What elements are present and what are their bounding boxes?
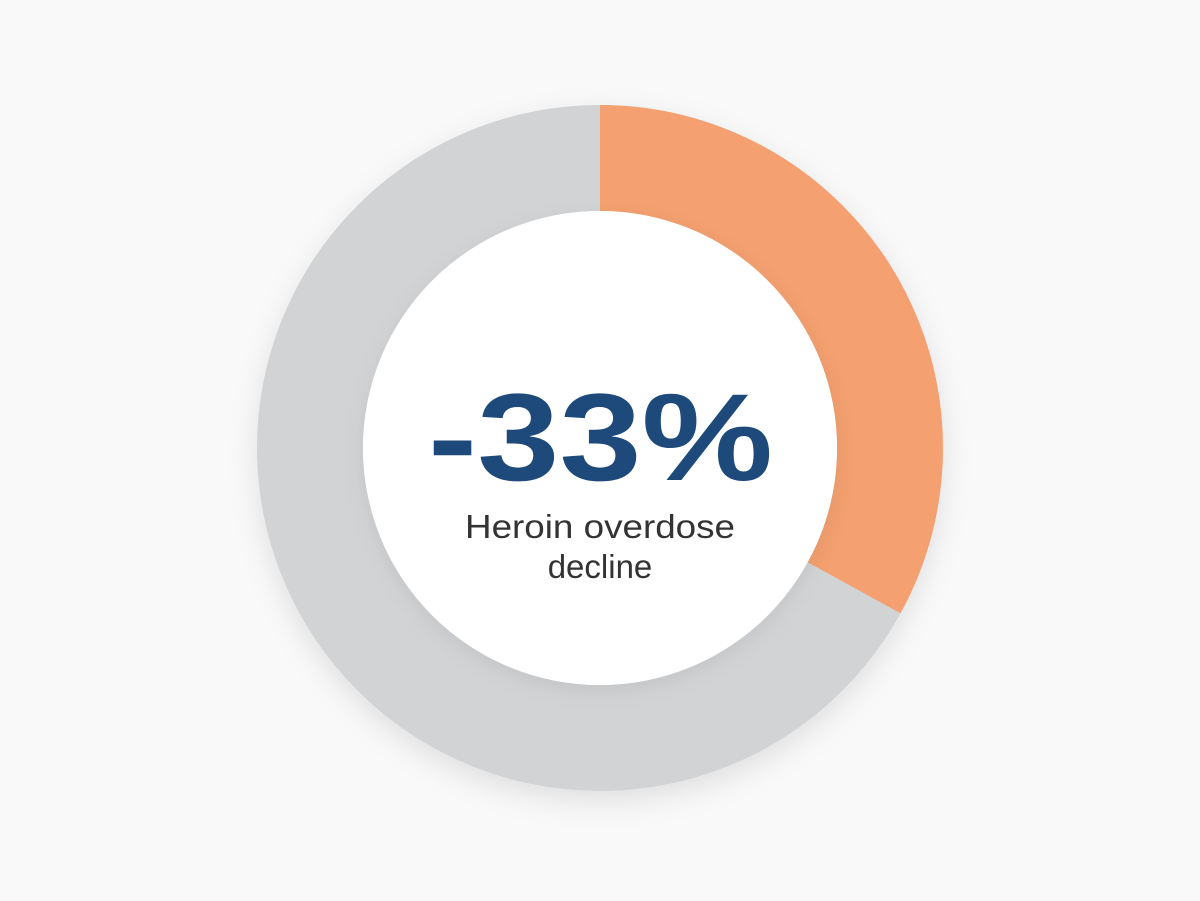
inner disc: [363, 211, 837, 685]
headline number: -33%: [428, 369, 773, 507]
ring segment: 33% decline: [310, 158, 890, 738]
ring background (remaining share): [310, 158, 890, 738]
label text: [465, 508, 735, 585]
label text: Heroin overdose: [465, 508, 735, 545]
label text: decline: [548, 548, 652, 585]
